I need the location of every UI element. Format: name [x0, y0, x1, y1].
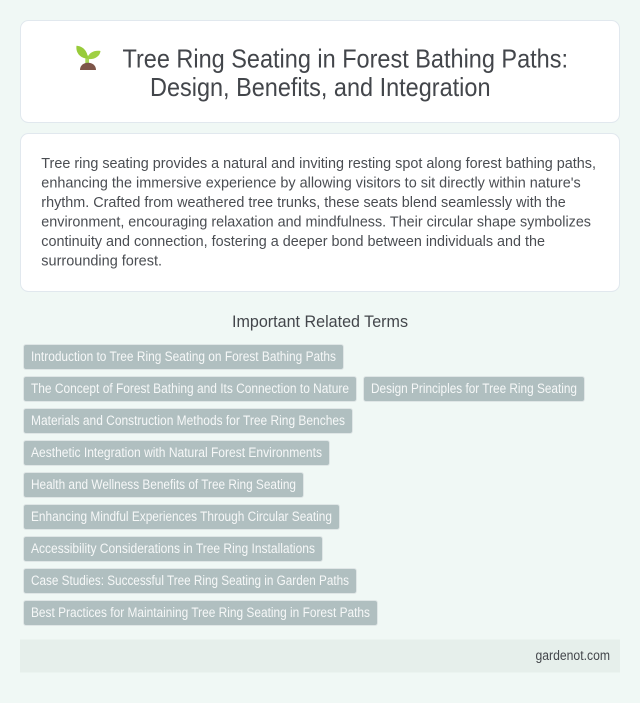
tag 7 — [24, 504, 340, 530]
footer source text: gardenot.com — [536, 648, 610, 663]
title text: Tree Ring Seating in Forest Bathing Paths: — [122, 44, 568, 74]
tag 10 — [24, 600, 378, 626]
description text: environment, encouraging relaxation and mindfulness. Their circular shape symbolizes — [41, 214, 591, 230]
tag 5: Aesthetic Integration with Natural Forest Environments — [31, 445, 322, 460]
tag 5 — [24, 440, 330, 466]
tag 2: The Concept of Forest Bathing and Its Connection to Nature — [31, 381, 349, 396]
description text: Tree ring seating provides a natural and inviting resting spot along forest bathing paths, — [41, 156, 596, 172]
tag 3 — [364, 376, 584, 402]
panel: description card — [20, 134, 620, 292]
tag 9 — [24, 568, 356, 594]
tag 8: Accessibility Considerations in Tree Ring Installations — [31, 541, 315, 556]
panel: title card — [20, 20, 620, 122]
tag list — [24, 344, 584, 626]
title text: Design, Benefits, and Integration — [150, 72, 490, 102]
tag 7: Enhancing Mindful Experiences Through Circular Seating — [31, 509, 332, 524]
description text: continuity and connection, fostering a deeper bond between individuals and the — [41, 234, 545, 250]
tag 9: Case Studies: Successful Tree Ring Seating in Garden Paths — [31, 573, 349, 588]
tag 8 — [24, 536, 322, 562]
tag 6: Health and Wellness Benefits of Tree Ring Seating — [31, 477, 296, 492]
title text — [122, 44, 568, 102]
tag 4 — [24, 408, 352, 434]
tag 1 — [24, 344, 344, 370]
tag 6 — [24, 472, 304, 498]
tag 10: Best Practices for Maintaining Tree Ring Seating in Forest Paths — [31, 605, 370, 620]
footer bar — [20, 640, 620, 672]
tag 2 — [24, 376, 356, 402]
tag 4: Materials and Construction Methods for Tree Ring Benches — [31, 413, 345, 428]
description text: enhancing the immersive experience by allowing visitors to sit directly within nature's — [41, 176, 581, 192]
tag 3: Design Principles for Tree Ring Seating — [371, 381, 577, 396]
icon: sprout — [76, 46, 100, 70]
heading: important related terms: Important Related Terms — [232, 312, 408, 331]
description text: surrounding forest. — [41, 254, 162, 270]
description text: rhythm. Crafted from weathered tree trunks, these seats blend seamlessly with the — [41, 195, 566, 211]
description text — [41, 156, 596, 270]
tag 1: Introduction to Tree Ring Seating on Forest Bathing Paths — [31, 349, 336, 364]
